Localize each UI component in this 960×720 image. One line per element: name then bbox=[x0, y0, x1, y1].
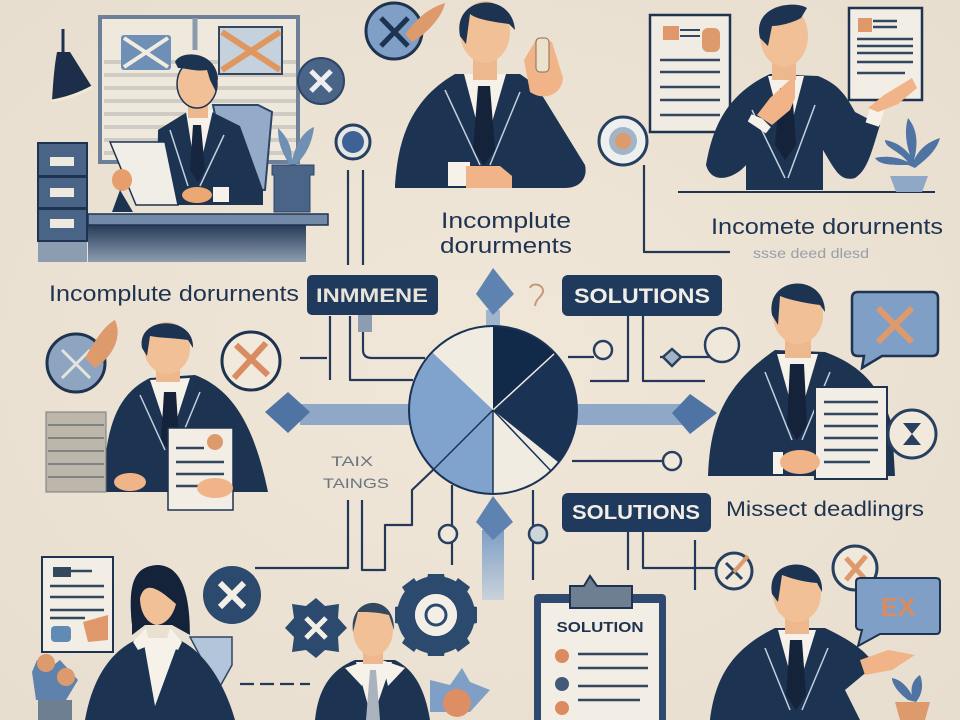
icon: crossed circle bbox=[298, 58, 344, 104]
icon: speech bubble with cross bbox=[852, 292, 938, 368]
label: incomplete documents, right: Incomete dorurnents bbox=[711, 214, 943, 239]
icon: question mark outline bbox=[530, 285, 543, 306]
icon: crossed circle orange, bottom right bbox=[833, 546, 877, 590]
icon: plant, top right bbox=[875, 118, 940, 192]
icon: medallion bbox=[599, 117, 647, 165]
badge: solutions top bbox=[562, 275, 722, 316]
figure: man gesturing, top centre bbox=[395, 1, 586, 188]
figure: man thinking, top right bbox=[706, 5, 917, 190]
label: missed deadlines: Missect deadlingrs bbox=[726, 498, 924, 521]
text: tax: TAIX bbox=[331, 453, 374, 469]
panel: solution clipboard bbox=[534, 576, 666, 720]
icon: crossed circle with pen bbox=[366, 3, 445, 59]
caption: deadlines: ssse deed dlesd bbox=[753, 245, 869, 261]
document, far top right bbox=[849, 8, 922, 100]
icon: potted plant bbox=[272, 127, 314, 212]
figure: man, bottom centre bbox=[315, 603, 490, 720]
desk bbox=[88, 214, 328, 262]
label: incomplete documents, centre: Incomplute bbox=[441, 208, 571, 233]
icon: crossed circle orange bbox=[222, 332, 280, 390]
figure: man with document, left bbox=[103, 322, 268, 510]
panel: desk scene, top left bbox=[38, 17, 328, 262]
icon: plant, bottom right bbox=[892, 675, 930, 720]
label: incomplete documents, left: Incomplute dorurnents bbox=[49, 281, 299, 306]
icon: filing cabinet bbox=[38, 143, 87, 262]
icon: small marker circles bbox=[439, 328, 739, 543]
label: documents line, centre: dorurments bbox=[440, 233, 572, 258]
chart: pie bbox=[409, 326, 577, 494]
icon: dark crossed circle bbox=[203, 566, 261, 624]
badge: solutions lower: SOLUTIONS bbox=[572, 502, 700, 524]
arrow: lower connector bbox=[476, 496, 513, 600]
badge: immense: INMMENE bbox=[316, 286, 428, 307]
icon: crossed gear small bbox=[285, 598, 347, 658]
document bbox=[42, 557, 113, 652]
figure: man gesturing, bottom right bbox=[710, 564, 915, 720]
icon: paper stack bbox=[46, 412, 106, 492]
figure: woman with document, bottom left bbox=[32, 557, 235, 720]
icon: crossed circle with pen, left bbox=[47, 320, 118, 392]
icon: crossed circle, bottom right bbox=[716, 553, 752, 589]
chair bbox=[190, 637, 232, 690]
window with crossed charts bbox=[100, 17, 298, 162]
figure: man with document, right bbox=[708, 283, 895, 479]
icon: small seal bbox=[336, 125, 370, 159]
arrow: left connector bbox=[265, 392, 412, 433]
badge: solutions top: SOLUTIONS bbox=[574, 285, 710, 308]
badge: immense bbox=[307, 275, 438, 315]
document, top right bbox=[650, 15, 730, 132]
desk line, top right bbox=[678, 191, 935, 193]
chair bbox=[213, 105, 272, 190]
icon: speech bubble EX bbox=[856, 578, 940, 646]
icon: hourglass circle bbox=[888, 410, 936, 458]
icon: gear large bbox=[395, 574, 477, 656]
icon: grey stub under badge bbox=[358, 315, 372, 332]
text: tainings: TAINGS bbox=[323, 475, 389, 491]
icon: speech bubble EX: EX bbox=[881, 592, 916, 622]
badge: solutions lower bbox=[562, 493, 711, 532]
figure: man with paper bbox=[110, 54, 263, 212]
arrow: right connector bbox=[575, 394, 717, 434]
icon: diamond marker top bbox=[476, 268, 514, 328]
icon: hanging lamp bbox=[52, 29, 92, 101]
text: solution: SOLUTION bbox=[556, 619, 644, 636]
